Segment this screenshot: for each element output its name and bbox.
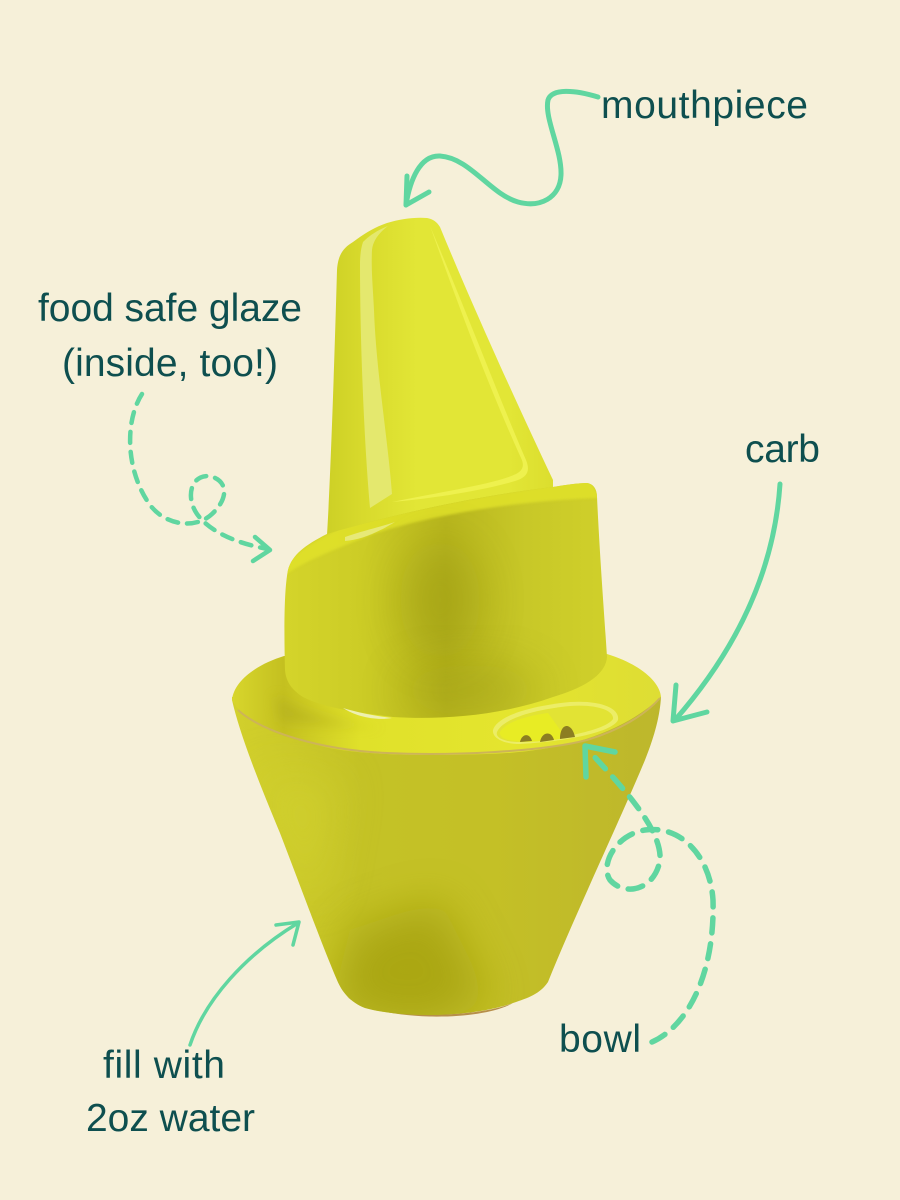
bowl hole xyxy=(493,702,618,744)
arrow: bowl dashed loop xyxy=(585,746,713,1042)
label: carb xyxy=(673,428,820,721)
base cone xyxy=(232,697,661,1030)
label: fill with water: fill with xyxy=(103,1044,225,1087)
label: mouthpiece: mouthpiece xyxy=(601,84,808,127)
arrow: carb xyxy=(673,484,780,721)
highlight on mouthpiece xyxy=(360,226,392,508)
carb holes xyxy=(520,726,575,742)
ceramic object xyxy=(232,218,661,1030)
label: bowl xyxy=(559,746,713,1061)
label: mouthpiece xyxy=(406,84,808,205)
arrow: fill xyxy=(190,922,299,1045)
rim edge line xyxy=(238,698,660,754)
label: bowl: bowl xyxy=(559,1018,641,1061)
mouthpiece xyxy=(327,218,553,545)
label: food safe glaze: food safe glaze xyxy=(38,287,302,330)
middle section xyxy=(284,480,607,719)
label: food safe glaze xyxy=(38,287,302,561)
label: food safe glaze: (inside, too!) xyxy=(62,342,278,385)
rim shadow beneath middle xyxy=(275,695,385,728)
base rim top xyxy=(232,654,661,755)
unglazed foot xyxy=(347,997,513,1017)
label: fill with water: 2oz water xyxy=(86,1097,255,1140)
label: carb: carb xyxy=(745,428,820,471)
arrow: glaze dashed loop xyxy=(130,394,270,561)
arrow: mouthpiece xyxy=(406,91,598,205)
label: fill with water xyxy=(86,922,299,1140)
